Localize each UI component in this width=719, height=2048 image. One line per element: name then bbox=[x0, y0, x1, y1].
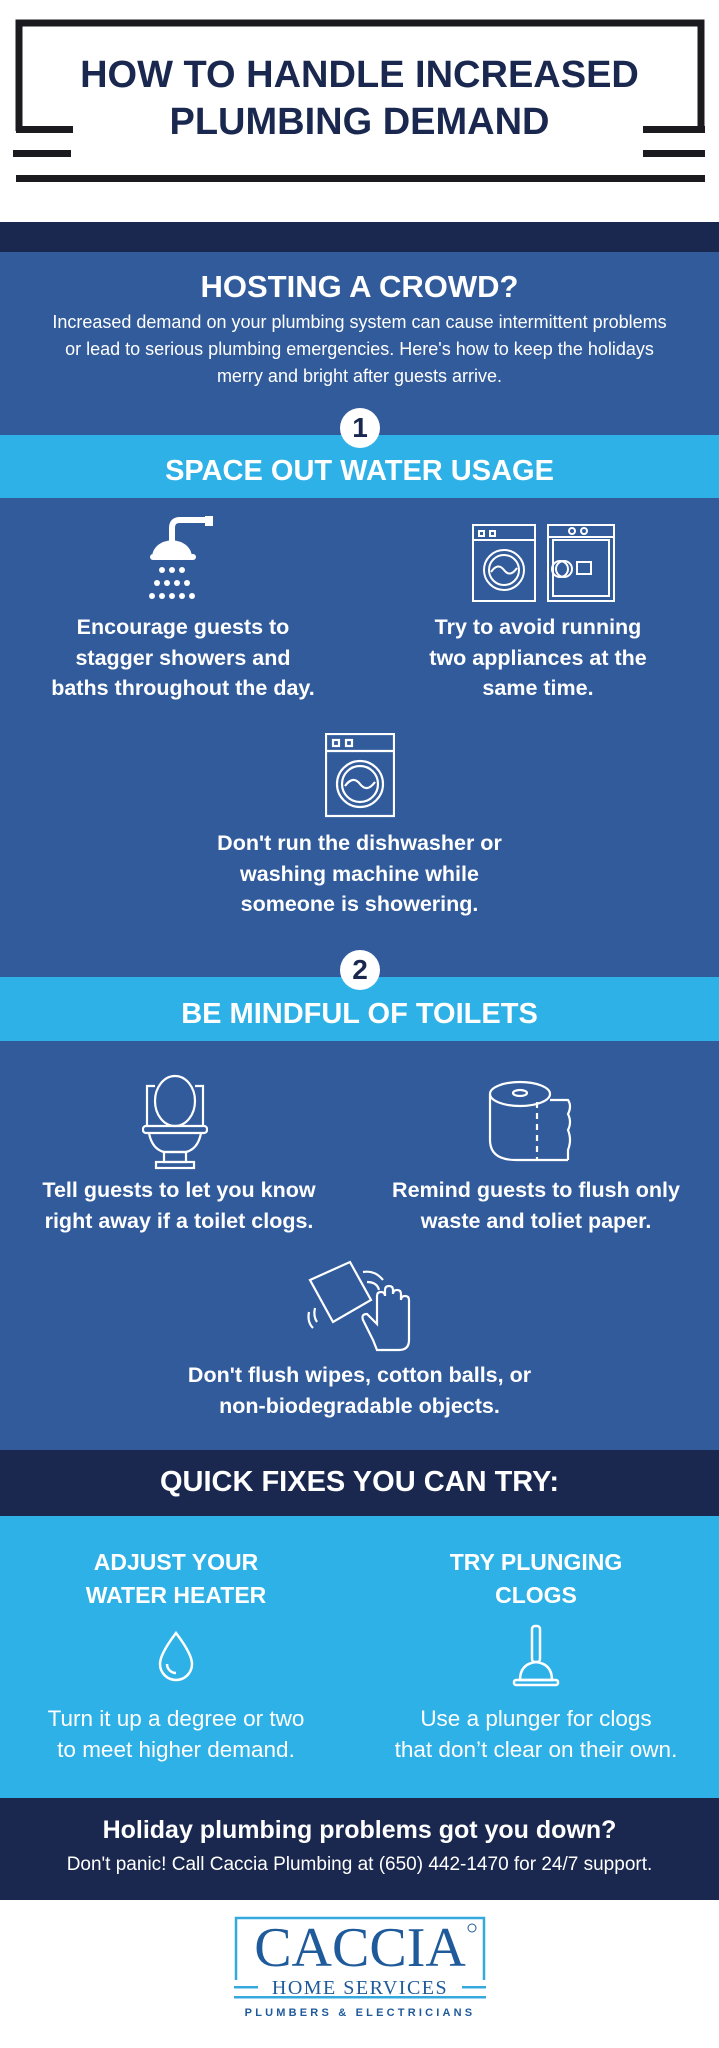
icon: water drop bbox=[158, 1631, 194, 1682]
quick fixes panel bbox=[0, 1516, 719, 1798]
intro text: or lead to serious plumbing emergencies. Here's how to keep the holidays bbox=[65, 339, 654, 359]
fix: water heater: ADJUST YOUR bbox=[94, 1549, 258, 1575]
section 1 heading: SPACE OUT WATER USAGE bbox=[165, 455, 554, 487]
logo: HOME SERVICES bbox=[272, 1977, 448, 1999]
icon: washer and dishwasher bbox=[472, 524, 615, 602]
icon: plunger bbox=[512, 1624, 560, 1686]
text: toilet clogs: right away if a toilet clogs. bbox=[45, 1208, 313, 1232]
fix: plunging: TRY PLUNGING bbox=[450, 1549, 622, 1575]
fix: water heater bbox=[48, 1549, 304, 1762]
text: flush only waste bbox=[392, 1178, 680, 1232]
number 2: 2 bbox=[352, 954, 368, 985]
text: flush only waste: waste and toliet paper. bbox=[421, 1208, 651, 1232]
fix: plunging: that don’t clear on their own. bbox=[395, 1737, 677, 1762]
navy strip bbox=[0, 222, 719, 252]
text: dishwasher while showering: someone is showering. bbox=[241, 892, 478, 916]
text: stagger showers: Encourage guests to bbox=[77, 615, 289, 639]
icon: shower bbox=[149, 516, 213, 599]
text: toilet clogs bbox=[42, 1178, 316, 1232]
fix: water heater: Turn it up a degree or two bbox=[48, 1706, 304, 1731]
section 2 heading: BE MINDFUL OF TOILETS bbox=[181, 998, 538, 1030]
fix: water heater: to meet higher demand. bbox=[57, 1737, 295, 1762]
intro text: Increased demand on your plumbing system can cause intermittent problems bbox=[52, 312, 667, 332]
text: stagger showers bbox=[51, 615, 315, 700]
fix: plunging: Use a plunger for clogs bbox=[420, 1706, 652, 1731]
text: stagger showers: baths throughout the day. bbox=[51, 676, 315, 700]
intro text: merry and bright after guests arrive. bbox=[217, 366, 502, 386]
intro panel bbox=[0, 252, 719, 977]
fix: plunging bbox=[394, 1549, 677, 1762]
text: flush only waste: Remind guests to flush only bbox=[392, 1178, 680, 1202]
title frame bbox=[13, 20, 705, 182]
text: don't flush wipes: non-biodegradable objects. bbox=[219, 1394, 500, 1418]
fix: plunging: CLOGS bbox=[495, 1582, 577, 1608]
text: two appliances bbox=[429, 615, 647, 700]
text: dishwasher while showering: washing machine while bbox=[240, 862, 479, 886]
logo bbox=[234, 1916, 486, 2019]
number 2 bbox=[340, 950, 380, 990]
icon: toilet bbox=[142, 1074, 208, 1170]
intro text bbox=[52, 312, 667, 386]
text: dishwasher while showering bbox=[217, 831, 502, 916]
text: dishwasher while showering: Don't run the dishwasher or bbox=[217, 831, 502, 855]
text: two appliances: same time. bbox=[482, 676, 594, 700]
footer callout: Don't panic! Call Caccia Plumbing at (650) 442-1470 for 24/7 support. bbox=[67, 1854, 652, 1875]
section 1 band bbox=[0, 435, 719, 498]
footer callout bbox=[0, 1798, 719, 1900]
title bbox=[80, 54, 639, 143]
icon: washer bbox=[325, 733, 395, 818]
title: PLUMBING DEMAND bbox=[170, 101, 549, 143]
number 1: 1 bbox=[352, 412, 368, 443]
quick fixes header: QUICK FIXES YOU CAN TRY: bbox=[160, 1466, 559, 1498]
fix: water heater: WATER HEATER bbox=[86, 1582, 266, 1608]
text: two appliances: Try to avoid running bbox=[435, 615, 641, 639]
title: HOW TO HANDLE INCREASED bbox=[80, 54, 639, 96]
icon: wipes and hand bbox=[307, 1260, 410, 1352]
section 2 band bbox=[0, 977, 719, 1041]
footer callout: Holiday plumbing problems got you down? bbox=[103, 1816, 616, 1844]
logo: CACCIA bbox=[254, 1917, 466, 1979]
logo: PLUMBERS & ELECTRICIANS bbox=[245, 2007, 475, 2019]
text: stagger showers: stagger showers and bbox=[75, 646, 291, 670]
quick fixes header bbox=[0, 1450, 719, 1516]
number 1 bbox=[340, 408, 380, 448]
icon: toilet paper bbox=[488, 1080, 572, 1162]
text: don't flush wipes bbox=[188, 1363, 531, 1418]
text: don't flush wipes: Don't flush wipes, cotton balls, or bbox=[188, 1363, 531, 1387]
text: two appliances: two appliances at the bbox=[429, 646, 647, 670]
second panel bbox=[0, 1041, 719, 1450]
intro heading: HOSTING A CROWD? bbox=[200, 269, 518, 304]
text: toilet clogs: Tell guests to let you know bbox=[42, 1178, 316, 1202]
